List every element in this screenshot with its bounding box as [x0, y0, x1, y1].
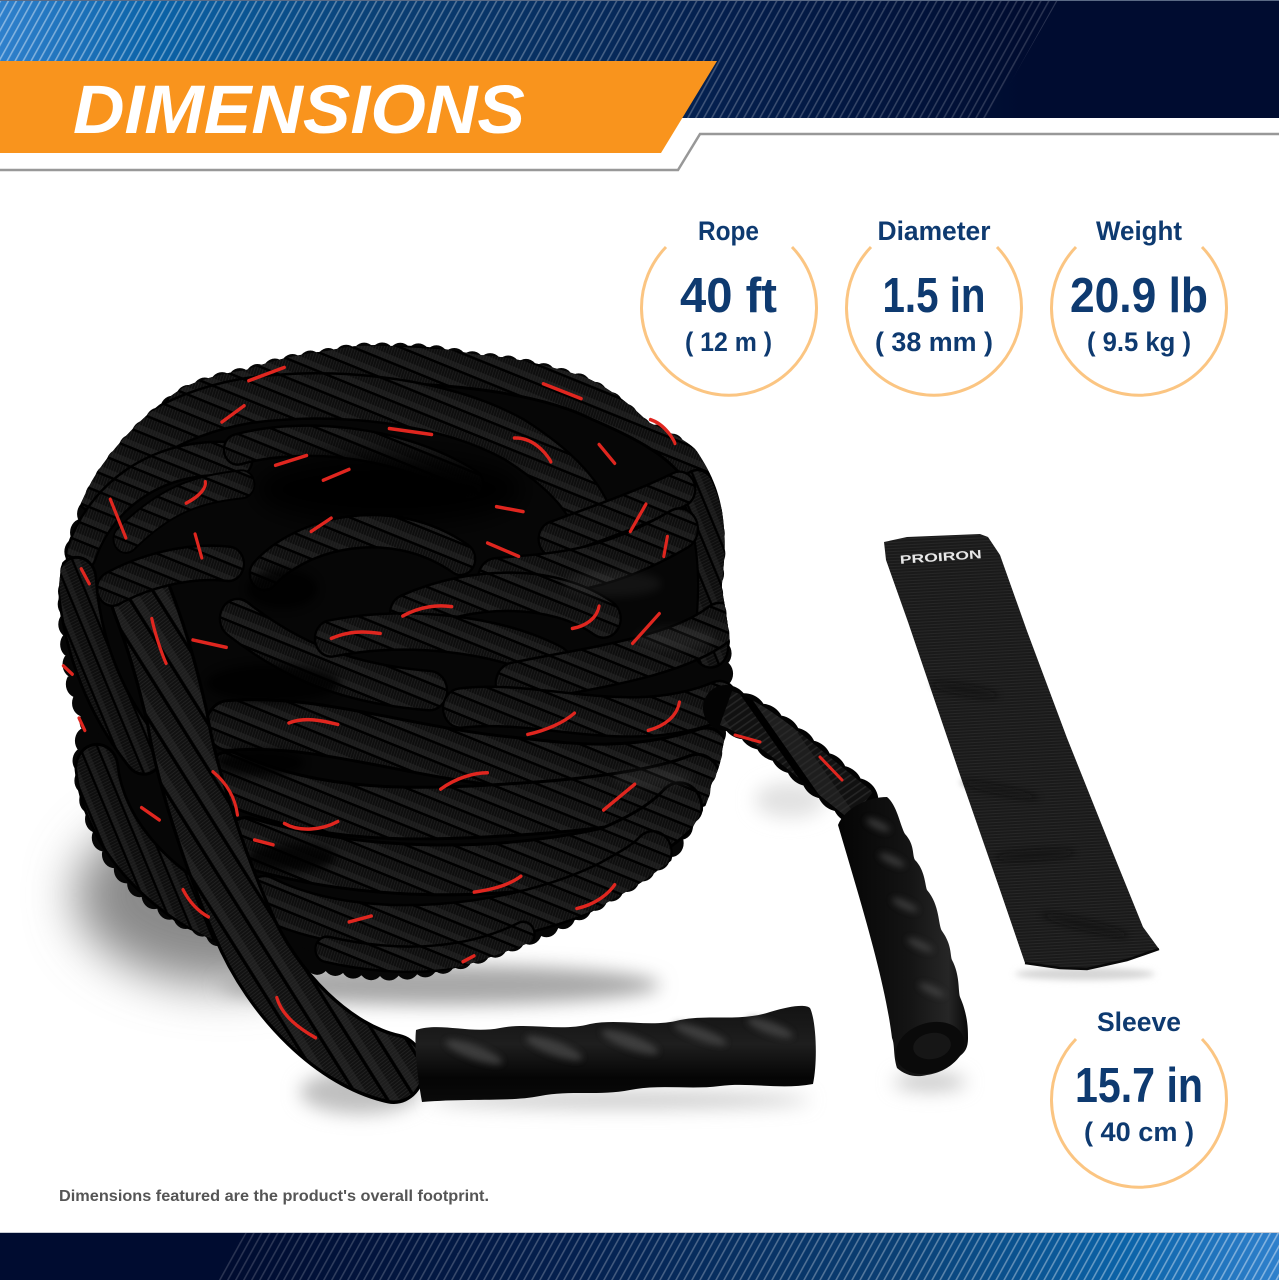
- stat: weight: ( 9.5 kg ): [1087, 327, 1191, 357]
- stat: sleeve: 15.7 in: [1075, 1059, 1203, 1113]
- red tracer threads: [63, 367, 679, 1038]
- floor shadows: [75, 782, 1155, 1114]
- stat: diameter: [847, 216, 1021, 395]
- handle highlights: [443, 1014, 795, 1069]
- grey outline under banner: [0, 134, 1279, 170]
- stat: weight: [1052, 216, 1226, 395]
- handle end cap: [889, 1013, 971, 1083]
- stat: sleeve: Sleeve: [1097, 1007, 1181, 1037]
- stat: diameter: ( 38 mm ): [875, 327, 993, 357]
- footer band: [0, 1232, 1279, 1280]
- sleeve: [884, 534, 1159, 969]
- specular sheen on the front rows: [563, 571, 715, 789]
- coil silhouette: [70, 356, 721, 967]
- sleeve logo: PROIRON: [899, 547, 982, 567]
- stat: sleeve: ( 40 cm ): [1084, 1117, 1194, 1147]
- left rope handle: [415, 1006, 816, 1102]
- title banner: [0, 61, 717, 153]
- stat: diameter: 1.5 in: [882, 269, 986, 323]
- stat: rope: Rope: [698, 216, 759, 246]
- back rope rows: [77, 363, 715, 917]
- stat: rope: [642, 216, 816, 395]
- sleeve ripples: [931, 679, 1130, 941]
- right rope end: [726, 708, 862, 806]
- rope row over strand top: [112, 563, 229, 589]
- stat: sleeve: [1052, 1007, 1226, 1187]
- stat: rope: 40 ft: [680, 269, 777, 323]
- right rope handle: [838, 797, 971, 1083]
- stat: diameter: Diameter: [878, 216, 991, 246]
- stat: weight: Weight: [1096, 216, 1182, 246]
- front rope rows: [229, 489, 720, 959]
- stat: rope: ( 12 m ): [685, 327, 772, 357]
- header band: [0, 0, 1279, 118]
- soft shade between rows: [206, 569, 340, 871]
- handle highlights: [865, 816, 946, 1000]
- stat: weight: 20.9 lb: [1070, 269, 1208, 323]
- hanging rope strand: [142, 599, 394, 1069]
- title: DIMENSIONS: [73, 71, 525, 148]
- rope coil: [63, 356, 721, 1069]
- dark hollow of the coil: [255, 454, 523, 524]
- footnote: Dimensions featured are the product's overall footprint.: [59, 1188, 489, 1205]
